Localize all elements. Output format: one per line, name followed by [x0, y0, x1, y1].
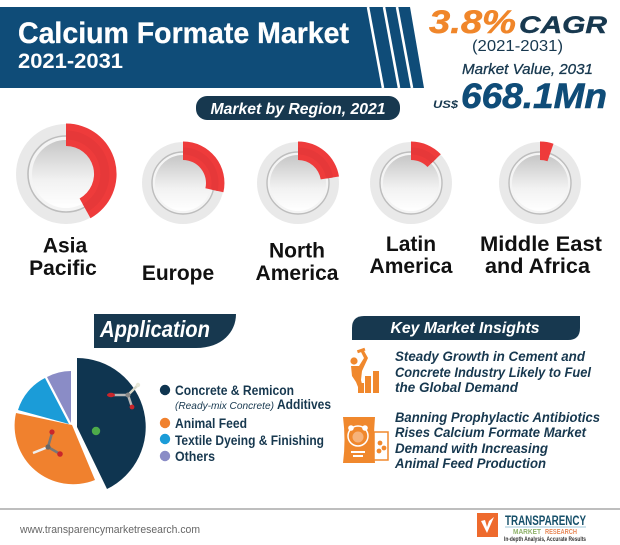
logo mark	[477, 513, 498, 537]
market value label: Market Value, 2031	[462, 61, 593, 78]
slice: animal feed	[15, 413, 95, 484]
label: Middle East and Africa: Middle East	[480, 233, 602, 256]
pie chart: application share	[15, 358, 146, 489]
legend	[160, 383, 331, 464]
legend text: concrete: Concrete & Remicon	[175, 383, 294, 398]
donut: Europe	[142, 142, 224, 285]
region heading pill: Market by Region, 2021	[210, 101, 386, 118]
label: North America: North	[269, 240, 325, 262]
logo tagline: In-depth Analysis, Accurate Results	[504, 536, 586, 543]
donut: Asia Pacific	[16, 123, 117, 280]
legend dot: concrete	[160, 385, 170, 395]
logo sub name: MARKET	[513, 529, 542, 536]
application heading tab	[94, 314, 236, 348]
molecule on animal feed slice	[33, 429, 63, 457]
label: Latin America: America	[370, 255, 453, 278]
title text: Calcium Formate Market	[18, 17, 349, 50]
logo: Transparency Market Research	[477, 513, 586, 543]
market value figure: 668.1Mn	[461, 77, 607, 116]
label: Asia Pacific: Asia	[43, 234, 87, 258]
legend text: ready-mix: (Ready-mix Concrete)	[175, 400, 274, 412]
slice: concrete	[77, 358, 146, 489]
green dot atom	[92, 427, 100, 435]
donut: North America	[256, 141, 339, 285]
icon: person climbing bars	[350, 348, 379, 393]
legend text: others: Others	[175, 449, 215, 464]
label: Asia Pacific: Pacific	[29, 257, 97, 280]
title banner	[0, 7, 424, 88]
website url: www.transparencymarketresearch.com	[19, 524, 200, 536]
insight text: antibiotics ban: Demand with Increasing	[395, 441, 549, 456]
key market insights heading	[352, 316, 580, 340]
label: Latin America: Latin	[386, 233, 436, 256]
logo name: TRANSPARENCY	[505, 513, 586, 528]
slice: others	[47, 371, 71, 423]
legend dot: textile	[160, 434, 170, 444]
CAGR percentage: 3.8%	[429, 4, 516, 40]
insight text: antibiotics ban: Animal Feed Production	[394, 456, 546, 471]
icon: animal feed bag	[343, 417, 388, 463]
legend text: additives: Additives	[277, 397, 331, 412]
region heading pill	[196, 96, 400, 120]
insight text: cement and concrete: Steady Growth in Cement and	[395, 349, 586, 364]
molecule on concrete slice	[107, 383, 140, 409]
label: North America: America	[256, 262, 339, 285]
insight text: cement and concrete: Concrete Industry Likely to Fuel	[395, 365, 591, 380]
legend dot: others	[160, 451, 170, 461]
CAGR stat block	[429, 4, 608, 116]
donut: Middle East and Africa	[480, 141, 602, 278]
insight text: antibiotics ban: Rises Calcium Formate Market	[395, 425, 586, 440]
donut: Latin America	[370, 142, 453, 278]
insight text: cement and concrete: the Global Demand	[395, 380, 519, 395]
logo sub name 2: RESEARCH	[545, 529, 577, 536]
US dollar prefix: US$	[433, 99, 459, 111]
label: Middle East and Africa: and Africa	[485, 255, 590, 278]
key market insights heading: Key Market Insights	[390, 320, 540, 337]
CAGR label: CAGR	[519, 12, 608, 39]
slice: textile	[18, 378, 69, 424]
legend dot: animal feed	[160, 418, 170, 428]
label: Europe: Europe	[142, 262, 214, 285]
title years: 2021-2031	[18, 50, 123, 73]
legend text: animal feed: Animal Feed	[175, 416, 247, 431]
insight text: antibiotics ban: Banning Prophylactic Antibiotics	[395, 410, 600, 425]
CAGR period: (2021-2031)	[472, 38, 563, 55]
application heading tab: Application	[99, 316, 210, 342]
legend text: textile: Textile Dyeing & Finishing	[175, 433, 324, 448]
